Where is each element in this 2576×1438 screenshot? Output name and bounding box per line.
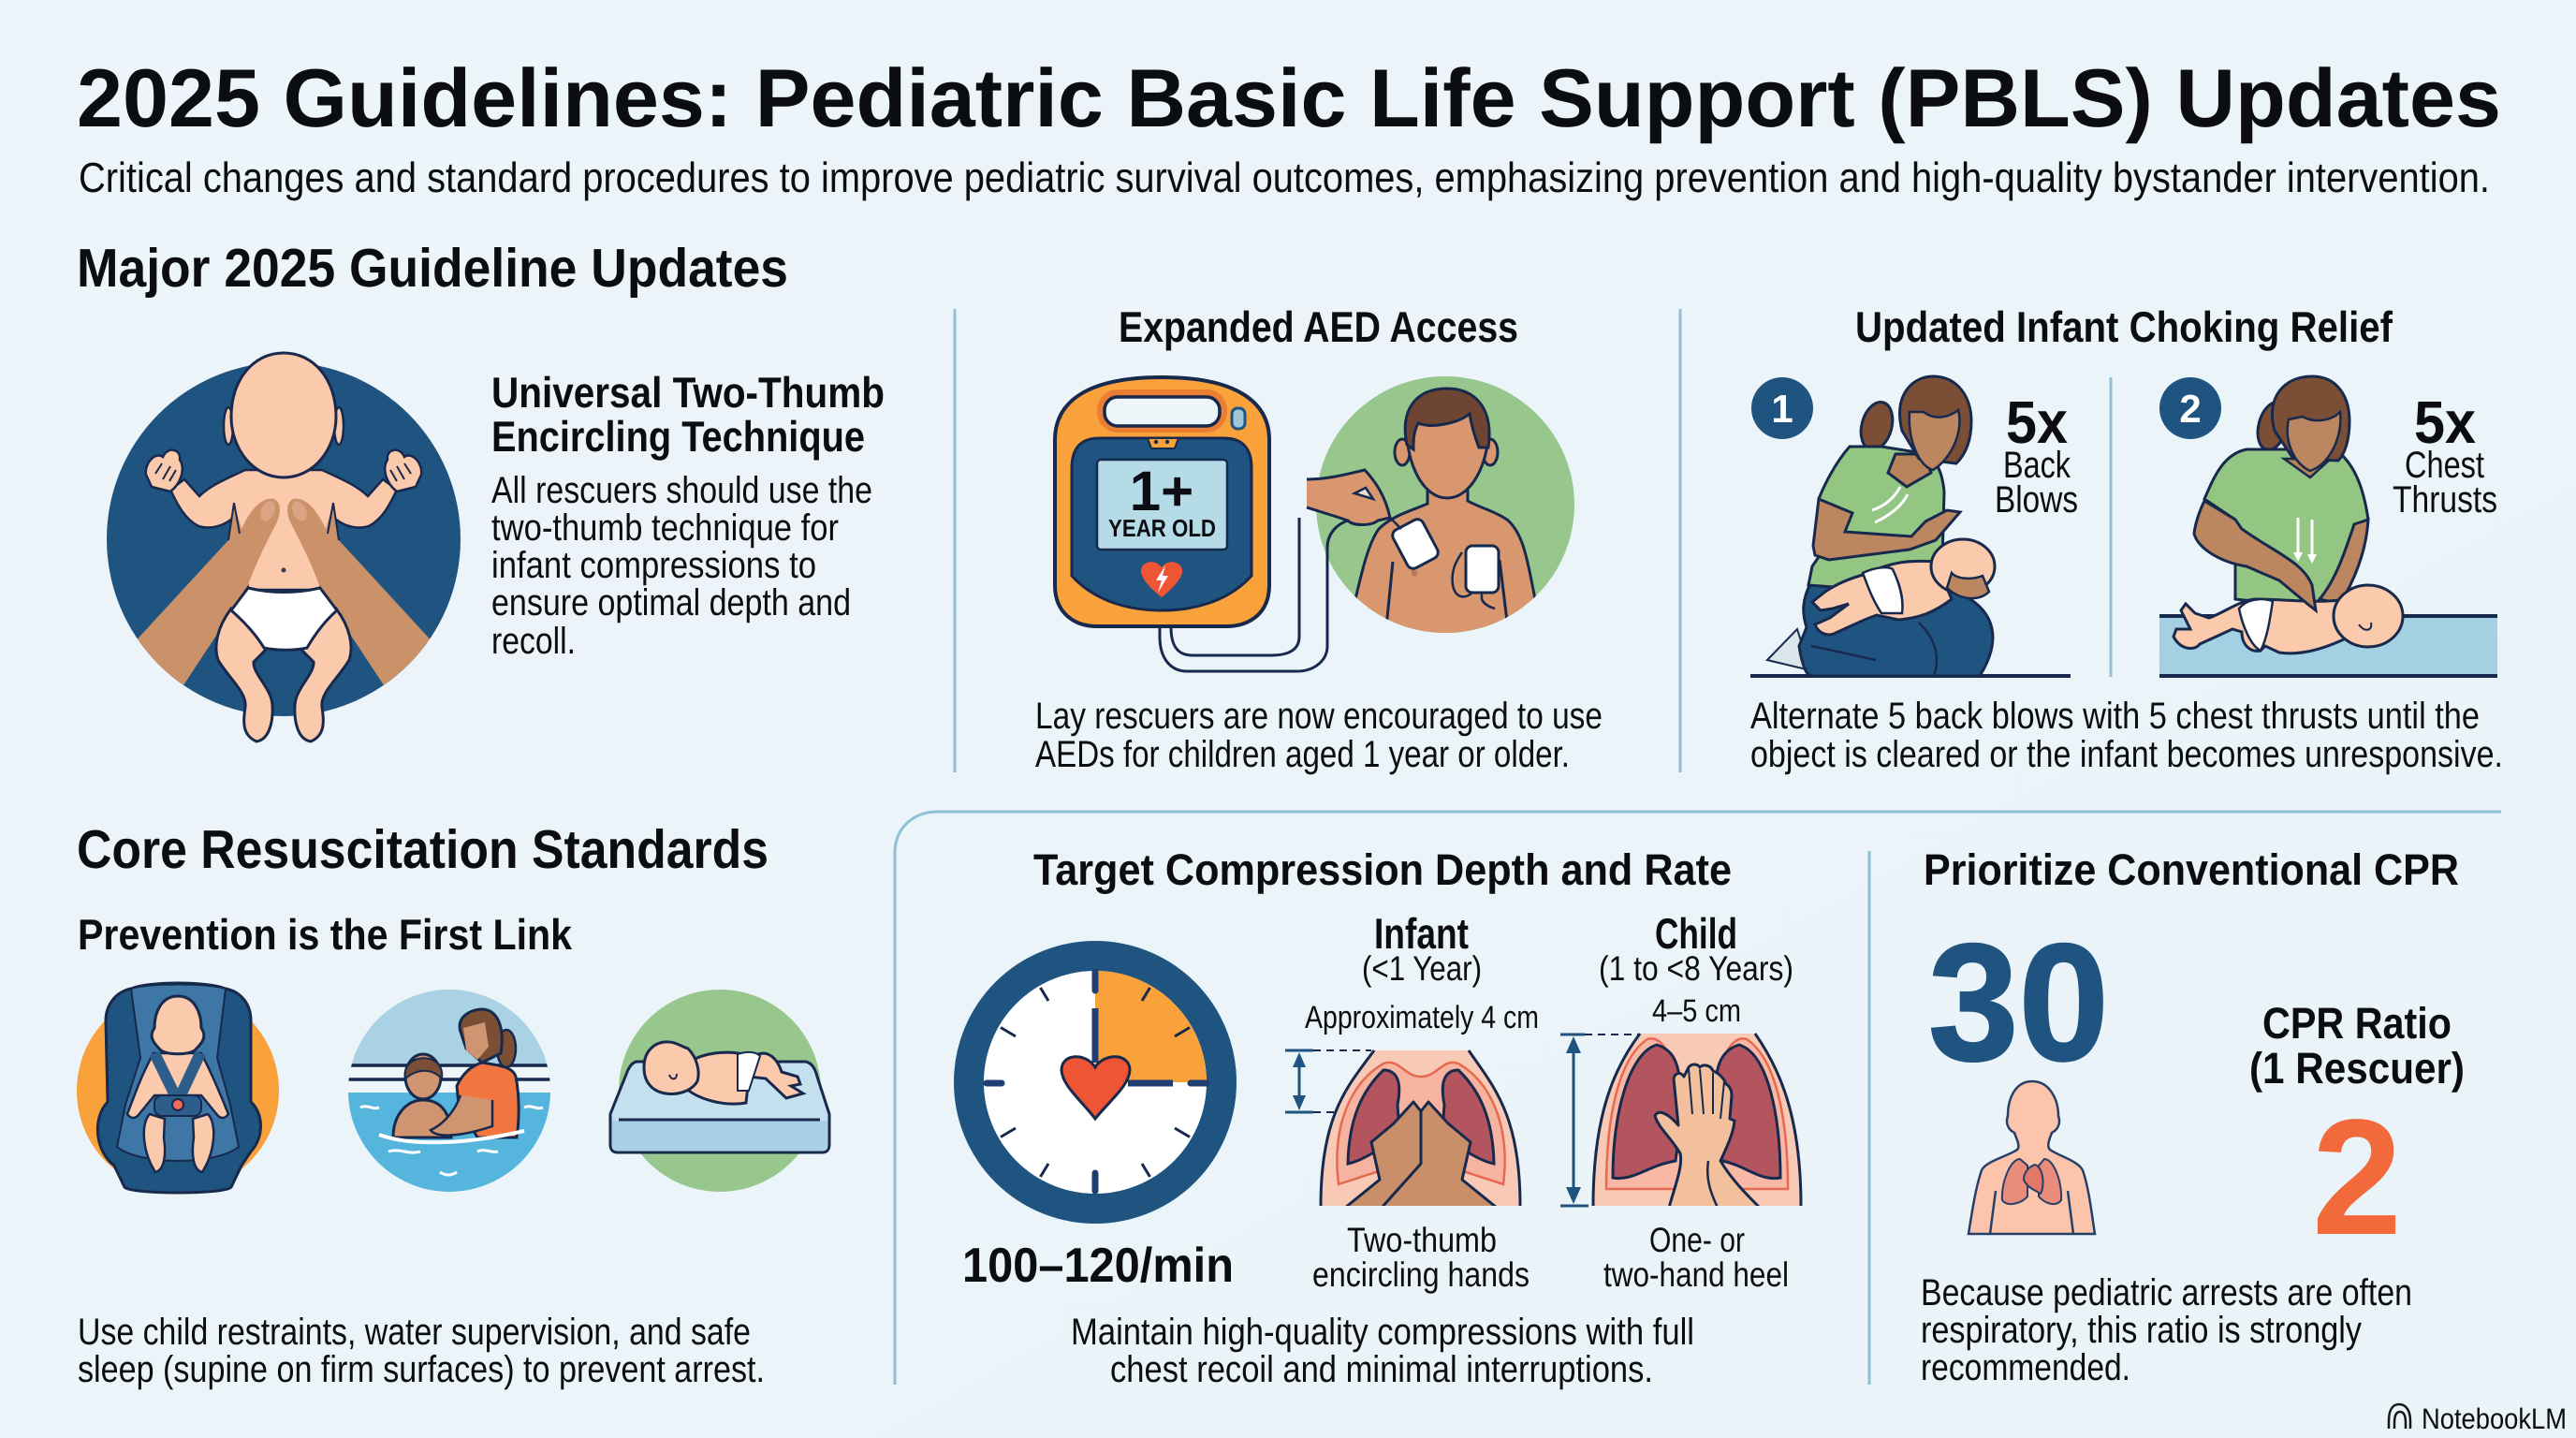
column: child depth: One- or — [1649, 1221, 1745, 1259]
step 1: back blows: 1 — [1771, 387, 1793, 431]
column: infant depth: Infant — [1374, 909, 1469, 958]
step 1: back blows: Back — [2003, 445, 2071, 486]
text: CPR note: recommended. — [1921, 1347, 2130, 1388]
heading: core standards: Core Resuscitation Standards — [77, 819, 768, 880]
icon: infant with two-thumb hands — [107, 353, 461, 741]
column: child depth: two-hand heel — [1603, 1255, 1789, 1294]
column: infant depth: Approximately 4 cm — [1305, 1000, 1539, 1035]
step 1: back blows: 5x — [2006, 389, 2068, 456]
label: CPR ratio: CPR Ratio — [2262, 998, 2452, 1048]
text: AED description: Lay rescuers are now encouraged to use — [1035, 696, 1603, 737]
heading: AED: Expanded AED Access — [1119, 302, 1518, 351]
heading: compression: Target Compression Depth and Rate — [1033, 844, 1732, 894]
panel: AED access — [1035, 302, 1603, 775]
dividers — [955, 309, 1680, 772]
column: child depth: 4–5 cm — [1652, 993, 1741, 1029]
panel: infant choking — [1750, 302, 2503, 775]
heading: two-thumb: Universal Two-Thumb — [491, 368, 885, 417]
column: child depth: Child — [1655, 909, 1737, 958]
column: child depth — [1560, 909, 1803, 1294]
text: compression note: Maintain high-quality compressions with full — [1071, 1312, 1694, 1353]
text: prevention description: sleep (supine on firm surfaces) to prevent arrest. — [78, 1349, 765, 1390]
panel: prevention — [77, 819, 829, 1390]
text: AED description: AEDs for children aged 1 year or older. — [1035, 734, 1570, 775]
subheading: prevention: Prevention is the First Link — [78, 910, 572, 959]
heading: two-thumb: Encircling Technique — [491, 412, 865, 461]
icon: safe sleep — [610, 990, 829, 1192]
heading: CPR: Prioritize Conventional CPR — [1924, 844, 2459, 894]
title: 2025 Guidelines: Pediatric Basic Life Support (PBLS) Updates — [77, 51, 2501, 144]
panel border: compression and CPR — [895, 812, 2501, 1385]
stat: 2 breaths: 2 — [2312, 1086, 2402, 1269]
text: CPR note: Because pediatric arrests are often — [1921, 1272, 2412, 1313]
step 1: back blows — [1750, 376, 2078, 676]
heading: major updates: Major 2025 Guideline Updates — [77, 238, 788, 299]
icon: child with AED pads: 1+ — [1130, 460, 1193, 522]
step 2: chest thrusts: Chest — [2405, 445, 2484, 486]
text: two-thumb description: recoll. — [491, 621, 576, 662]
step 2: chest thrusts — [2159, 376, 2497, 676]
column: infant depth: Two-thumb — [1347, 1221, 1497, 1259]
icon: child with AED pads — [1055, 376, 1574, 671]
icon: torso with lungs — [1969, 1081, 2095, 1234]
text: two-thumb description: two-thumb technique for — [491, 507, 839, 549]
text: prevention description: Use child restraints, water supervision, and safe — [78, 1312, 751, 1353]
panel: two-thumb technique — [107, 353, 885, 741]
text: choking description: Alternate 5 back blows with 5 chest thrusts until the — [1750, 696, 2480, 737]
step 2: chest thrusts: 2 — [2179, 387, 2202, 431]
icon: clock with heart — [969, 956, 1222, 1209]
icon: car seat — [77, 983, 279, 1193]
text: compression note: chest recoil and minimal interruptions. — [1110, 1349, 1653, 1390]
text: CPR note: respiratory, this ratio is strongly — [1921, 1310, 2362, 1351]
text: two-thumb description: ensure optimal depth and — [491, 582, 851, 624]
step 2: chest thrusts: Thrusts — [2393, 479, 2497, 521]
label: rate: 100–120/min — [962, 1239, 1234, 1293]
panel: compression depth and rate — [962, 844, 1803, 1390]
heading: choking: Updated Infant Choking Relief — [1855, 302, 2393, 351]
column: infant depth: (<1 Year) — [1362, 949, 1482, 988]
column: infant depth: encircling hands — [1312, 1255, 1530, 1294]
label: CPR ratio: (1 Rescuer) — [2249, 1043, 2465, 1093]
stat: 30 compressions: 30 — [1928, 909, 2109, 1095]
icon: water supervision — [348, 990, 550, 1196]
text: two-thumb description: infant compressions to — [491, 545, 816, 586]
column: infant depth — [1285, 909, 1539, 1294]
column: child depth: (1 to <8 Years) — [1599, 949, 1793, 988]
icon: child with AED pads: YEAR OLD — [1108, 514, 1216, 542]
text: two-thumb description: All rescuers should use the — [491, 470, 872, 511]
panel: conventional CPR — [1921, 844, 2465, 1388]
step 1: back blows: Blows — [1995, 479, 2078, 521]
step 2: chest thrusts: 5x — [2414, 389, 2476, 456]
